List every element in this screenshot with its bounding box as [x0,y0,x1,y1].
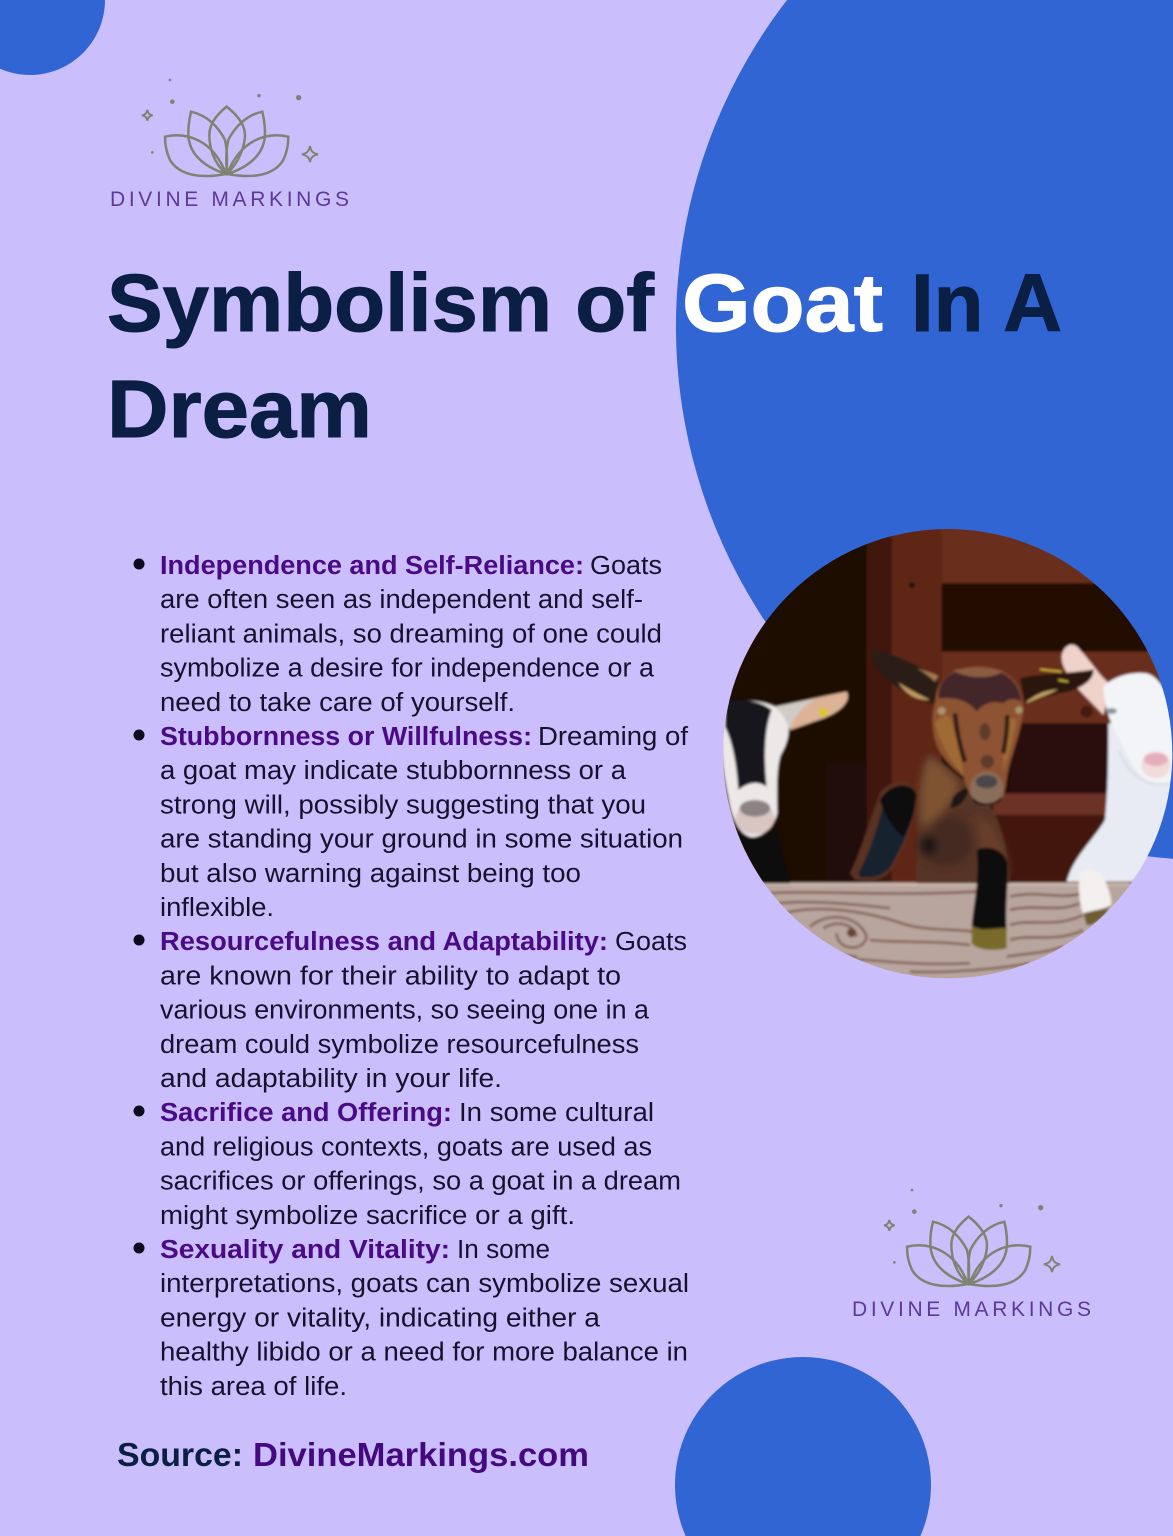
item text: healthy libido or a need for more balance in [160,1339,688,1367]
item text: In some cultural [459,1099,654,1127]
item text [160,1236,689,1401]
title: Dream [107,364,372,455]
item text: In some [457,1236,550,1264]
right goat [1062,645,1173,925]
item text: Independence and Self-Reliance: [160,552,584,580]
source line [117,1436,589,1473]
decorative circle: large top right [676,0,1173,859]
title [107,258,1062,455]
fence [762,880,1132,978]
decorative circle: top left [0,0,105,75]
middle goat near leg [972,848,1008,935]
item text: inflexible. [160,894,274,922]
title: Goat [682,258,883,349]
list item: independence [134,552,662,717]
decorative circle: bottom [675,1357,931,1536]
logo wordmark: DIVINE MARKINGS [110,188,349,211]
source line: DivineMarkings.com [253,1436,589,1473]
item text: Goats [615,928,687,956]
item text [160,1099,681,1230]
list item: stubbornness [134,723,689,922]
item text: reliant animals, so dreaming of one could [160,620,662,648]
item text: and adaptability in your life. [160,1065,502,1093]
item text: a goat may indicate stubbornness or a [160,757,627,785]
bullet [134,730,144,740]
item text: Goats [590,552,662,580]
item text: dream could symbolize resourcefulness [160,1031,639,1059]
photo: three goats in circle [710,520,1173,987]
item text: various environments, so seeing one in a [160,997,650,1025]
item text: are standing your ground in some situation [160,826,683,854]
item text [160,928,687,1093]
item text: sacrifices or offerings, so a goat in a dream [160,1168,681,1196]
item text: Sacrifice and Offering: [160,1099,452,1127]
item text: this area of life. [160,1373,347,1401]
item text: Sexuality and Vitality: [160,1236,450,1264]
item text: are known for their ability to adapt to [160,962,621,990]
list item: resourcefulness [134,928,687,1093]
item text: need to take care of yourself. [160,689,515,717]
bullet [134,1106,144,1116]
logo: bottom right [852,1189,1091,1321]
item text: might symbolize sacrifice or a gift. [160,1202,575,1230]
logo: top left [110,79,349,211]
source line: Source: [117,1436,243,1473]
logo wordmark: DIVINE MARKINGS [852,1298,1091,1321]
item text: but also warning against being too [160,860,581,888]
item text: energy or vitality, indicating either a [160,1304,601,1332]
item text: Stubbornness or Willfulness: [160,723,532,751]
bullet [134,558,144,570]
bullet list [134,552,689,1401]
item text: are often seen as independent and self- [160,586,643,614]
title: In A [911,258,1062,349]
item text: symbolize a desire for independence or a [160,655,655,683]
item text: and religious contexts, goats are used as [160,1133,652,1161]
item text: Dreaming of [538,723,689,751]
item text: Resourcefulness and Adaptability: [160,928,608,956]
middle goat far leg [850,782,917,881]
item text: interpretations, goats can symbolize sexual [160,1270,689,1298]
title: Symbolism of [107,258,655,349]
middle goat [872,650,1093,883]
list item: sexuality [134,1236,689,1401]
left goat [721,692,848,883]
icon: lotus with stars [884,1189,1060,1286]
item text [160,552,662,717]
item text: strong will, possibly suggesting that you [160,791,646,819]
icon: lotus with stars [142,79,318,176]
bullet [134,1242,144,1254]
item text [160,723,689,922]
list item: sacrifice [134,1099,681,1230]
bullet [134,934,144,946]
